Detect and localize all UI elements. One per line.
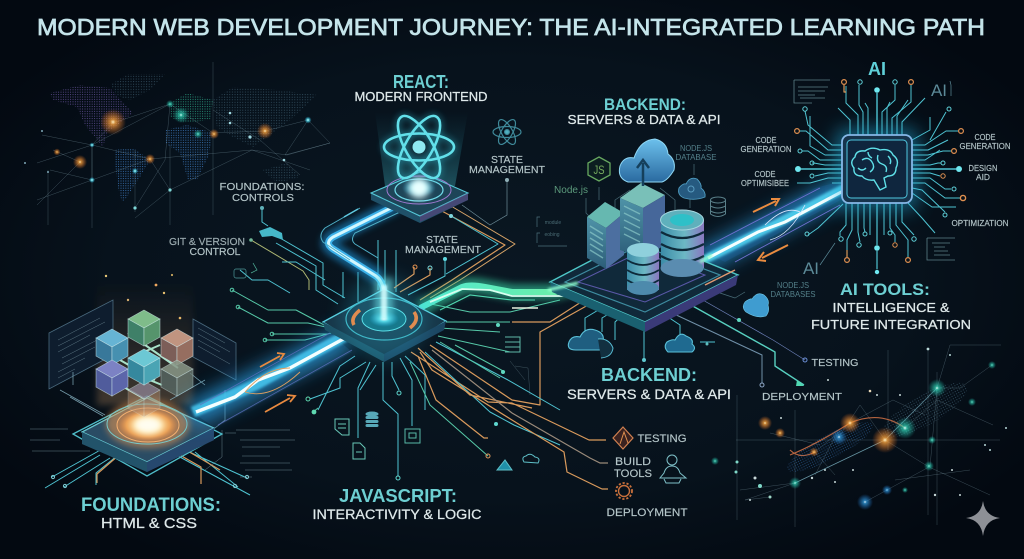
heading: Backend top: BACKEND:	[604, 95, 686, 114]
heading: Backend lower: BACKEND:	[601, 365, 697, 385]
label: build tools: BUILD	[615, 456, 651, 468]
icon: hand / controls	[259, 227, 283, 240]
icon: person at laptop	[660, 455, 686, 483]
heading: React: REACT:	[393, 72, 449, 92]
icon: cloud bottom left	[568, 329, 613, 358]
label: Node.js databases	[770, 281, 816, 299]
label: Node.js: Node.js	[554, 185, 588, 196]
code snippet labels	[537, 217, 567, 246]
icon: database	[366, 412, 378, 427]
heading: React	[354, 72, 488, 104]
cubes	[96, 310, 193, 417]
label: build tools	[614, 456, 652, 480]
beam: JavaScript to backend	[420, 283, 590, 310]
label: design aid: DESIGN	[968, 163, 998, 173]
label: foundations controls	[220, 181, 304, 204]
icon: Node JS hexagon: JS	[594, 163, 604, 177]
label: design aid: AID	[976, 172, 990, 182]
thin AI glyph: AI	[931, 81, 947, 100]
label: testing upper: TESTING	[812, 357, 858, 369]
world map with network	[24, 62, 330, 228]
icon: React atom	[384, 110, 454, 184]
heading: AI tools: INTELLIGENCE &	[832, 300, 950, 315]
label: code optimise	[741, 169, 789, 188]
heading: Foundations	[81, 495, 221, 532]
heading: AI tools	[811, 280, 971, 332]
light column	[97, 280, 193, 405]
icon: document	[335, 419, 349, 435]
label: Node.js databases: DATABASES	[770, 290, 816, 299]
heading: AI tools: FUTURE INTEGRATION	[811, 317, 971, 332]
heading: JavaScript: JAVASCRIPT:	[339, 486, 457, 506]
beam: backend to AI chip	[700, 180, 848, 262]
icon: small cloud database	[679, 178, 705, 199]
label: code generation left	[740, 135, 792, 154]
label: design aid	[968, 163, 998, 182]
label: git and version control: CONTROL	[190, 247, 241, 258]
code snippet labels: module	[545, 220, 561, 226]
sparks above cubes	[105, 274, 181, 319]
label: state management inner: STATE	[426, 235, 458, 246]
heading: Backend lower	[567, 365, 731, 402]
label: state management inner: MANAGEMENT	[405, 245, 481, 256]
heading: AI: AI	[868, 59, 886, 79]
server left	[587, 202, 624, 269]
panel: AI chip	[795, 80, 966, 274]
label: Node.js databases: NODE.JS	[777, 281, 809, 290]
lines above platform	[586, 164, 694, 228]
label: state management upper: STATE	[491, 155, 523, 166]
label: code optimise: OPTIMISIBEE	[741, 178, 789, 188]
panel: React hub	[371, 110, 468, 223]
label: deployment upper: DEPLOYMENT	[762, 391, 843, 403]
heading: AI tools: AI TOOLS:	[840, 280, 930, 299]
label: git and version control	[169, 237, 245, 258]
code panels around AI chip	[794, 80, 955, 278]
heading: React: MODERN FRONTEND	[354, 90, 488, 104]
label: Node.js database: DATABASE	[676, 153, 716, 162]
label: Node.js database	[676, 144, 716, 162]
platform	[73, 396, 222, 476]
icon: file	[353, 443, 365, 459]
heading: Backend lower: SERVERS & DATA & API	[567, 387, 731, 402]
connection: backend right traces	[585, 292, 807, 387]
platform	[550, 235, 738, 332]
database stack small	[627, 243, 659, 295]
chip body	[842, 135, 912, 203]
icon: small database outline	[710, 197, 726, 216]
circuit traces: left of JavaScript hub	[230, 206, 447, 342]
heading: Foundations: HTML & CSS	[101, 515, 197, 532]
label: code generation right	[960, 132, 1010, 151]
platform	[371, 172, 468, 223]
label: deployment lower: DEPLOYMENT	[606, 507, 688, 519]
server middle	[620, 183, 665, 258]
icons below JavaScript hub	[335, 412, 420, 459]
database stack large	[660, 210, 704, 277]
icon: testing diamond	[613, 427, 633, 449]
icon: small mountain and cloud	[497, 454, 539, 470]
arrows	[753, 199, 788, 261]
connection: React hub to JavaScript hub pipe	[321, 205, 400, 296]
label: code generation right: GENERATION	[960, 141, 1010, 151]
arrows	[260, 353, 295, 412]
label: state management inner	[405, 235, 481, 256]
chip glow	[835, 128, 919, 210]
icon: cloud bottom right	[665, 334, 694, 352]
label: state management upper	[469, 155, 545, 176]
label: code generation left: CODE	[756, 135, 777, 145]
thin AI glyph lower: AI	[803, 259, 819, 278]
starfield network	[711, 345, 1007, 527]
code panel left	[49, 300, 113, 389]
label: foundations controls: FOUNDATIONS:	[220, 181, 304, 193]
panel: foundations HTML and CSS hub	[30, 274, 295, 495]
icon: upload cloud	[619, 139, 674, 186]
chip traces	[795, 80, 966, 274]
icon: gear	[616, 483, 632, 499]
beam: foundations to JavaScript	[190, 333, 352, 428]
light cone	[375, 112, 468, 186]
heading: Foundations: FOUNDATIONS:	[81, 495, 221, 516]
code panel right	[193, 319, 236, 380]
icon: Node JS hexagon	[588, 157, 610, 181]
icon: frame	[405, 429, 420, 443]
glow under beam	[548, 255, 712, 290]
label: build tools: TOOLS	[614, 468, 652, 480]
panel: JavaScript hub	[323, 276, 446, 362]
icon: cloud near databases	[743, 294, 769, 317]
dots connector near build tools	[510, 361, 530, 395]
icon: small React atom	[493, 117, 521, 147]
label: foundations controls: CONTROLS	[232, 192, 294, 204]
label: testing lower: TESTING	[638, 433, 686, 445]
label: code optimise: CODE	[754, 169, 776, 179]
icon: brain	[852, 148, 897, 190]
heading: JavaScript: INTERACTIVITY & LOGIC	[312, 507, 482, 522]
hub traces	[30, 372, 295, 495]
panel: backend hub	[537, 164, 738, 332]
code snippet labels: eobing	[544, 232, 560, 238]
label: optimization: OPTIMIZATION	[952, 218, 1008, 228]
label: code generation right: CODE	[974, 132, 996, 142]
label: state management upper: MANAGEMENT	[469, 165, 545, 176]
label: code generation left: GENERATION	[740, 144, 792, 154]
small icons near git label	[234, 263, 257, 278]
heading: JavaScript	[312, 486, 482, 522]
heading: Backend top: SERVERS & DATA & API	[568, 112, 720, 127]
icon: right side stack	[505, 337, 520, 352]
icon: sparkle logo	[966, 501, 1000, 536]
label: git and version control: GIT & VERSION	[169, 237, 245, 248]
circuit traces: right and below JavaScript hub	[306, 295, 608, 489]
connection: React hub to state management traces	[420, 178, 515, 300]
title: MODERN WEB DEVELOPMENT JOURNEY: THE AI-INTEGRATED LEARNING PATH	[37, 14, 985, 40]
label: Node.js database: NODE.JS	[680, 144, 712, 153]
heading: Backend top	[568, 95, 720, 127]
